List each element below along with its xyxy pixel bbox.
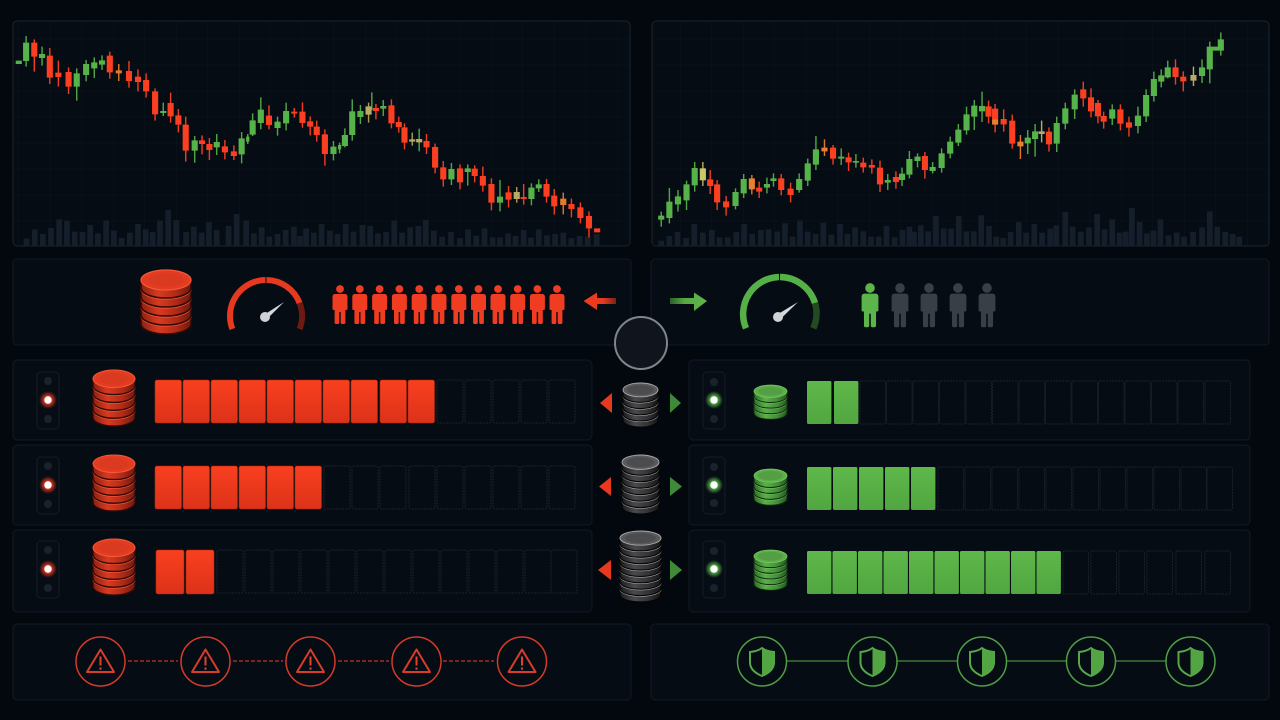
people: twelve red figures [332,285,564,324]
candlesticks: falling chart [19,36,597,237]
icon: coin stack [754,550,787,590]
panel: right status row [651,259,1269,345]
centre row 1: coins with arrows [600,383,681,427]
icon: red coin stack [141,270,191,334]
progress bar [155,380,575,423]
icon: warning 3 [286,637,335,686]
progress bar [807,467,1232,510]
right row 3: ten filled [689,530,1250,612]
progress bar [807,381,1230,424]
icon: coin stack [93,539,135,595]
progress bar [807,551,1230,594]
icon: shield 4 [1066,637,1116,686]
indicator light [703,541,725,598]
gauge: red [230,280,302,329]
icon: coin stack [93,370,135,426]
left row 2: six of fifteen [13,445,592,525]
icon: shield 1 [738,637,786,686]
volume bars: rising chart [661,208,1239,246]
left row 3: two of fifteen [13,530,592,612]
panel: warning chain [13,624,631,700]
right row 1: two filled [689,360,1250,440]
connectors: solid [787,660,1166,662]
candlesticks: rising chart [661,32,1221,227]
icon: shield 2 [848,637,897,686]
centre row 2: coins with arrows [599,455,682,514]
panel: falling candlestick chart [13,21,630,246]
indicator light [37,541,59,598]
panel: left status row [13,259,631,345]
volume bars: falling chart [27,210,597,246]
arrow: left red [584,292,616,310]
left row 1: ten of fifteen [13,360,592,440]
connectors: dashed [128,660,494,662]
panel: shield chain [651,624,1269,700]
indicator light [703,372,725,429]
progress bar [155,466,575,509]
gauge: green [743,277,816,328]
icon: warning 2 [181,637,230,686]
icon: coin stack [93,455,135,511]
centre circle [615,317,667,369]
indicator light [703,457,725,514]
arrow: right green [670,292,707,311]
icon: coin stack [754,469,787,505]
centre row 3: coins with arrows [598,531,682,602]
right row 2: five filled [689,445,1250,525]
icon: warning 1 [76,637,125,686]
icon: coin stack [754,385,787,419]
progress bar [156,550,577,594]
icon: shield 5 [1166,637,1215,686]
icon: warning 4 [392,637,441,686]
icon: warning 5 [498,637,546,686]
icon: shield 3 [958,637,1006,686]
indicator light [37,457,59,514]
indicator light [37,372,59,429]
people: one green and four grey figures [862,283,995,327]
panel: rising candlestick chart [652,21,1269,246]
